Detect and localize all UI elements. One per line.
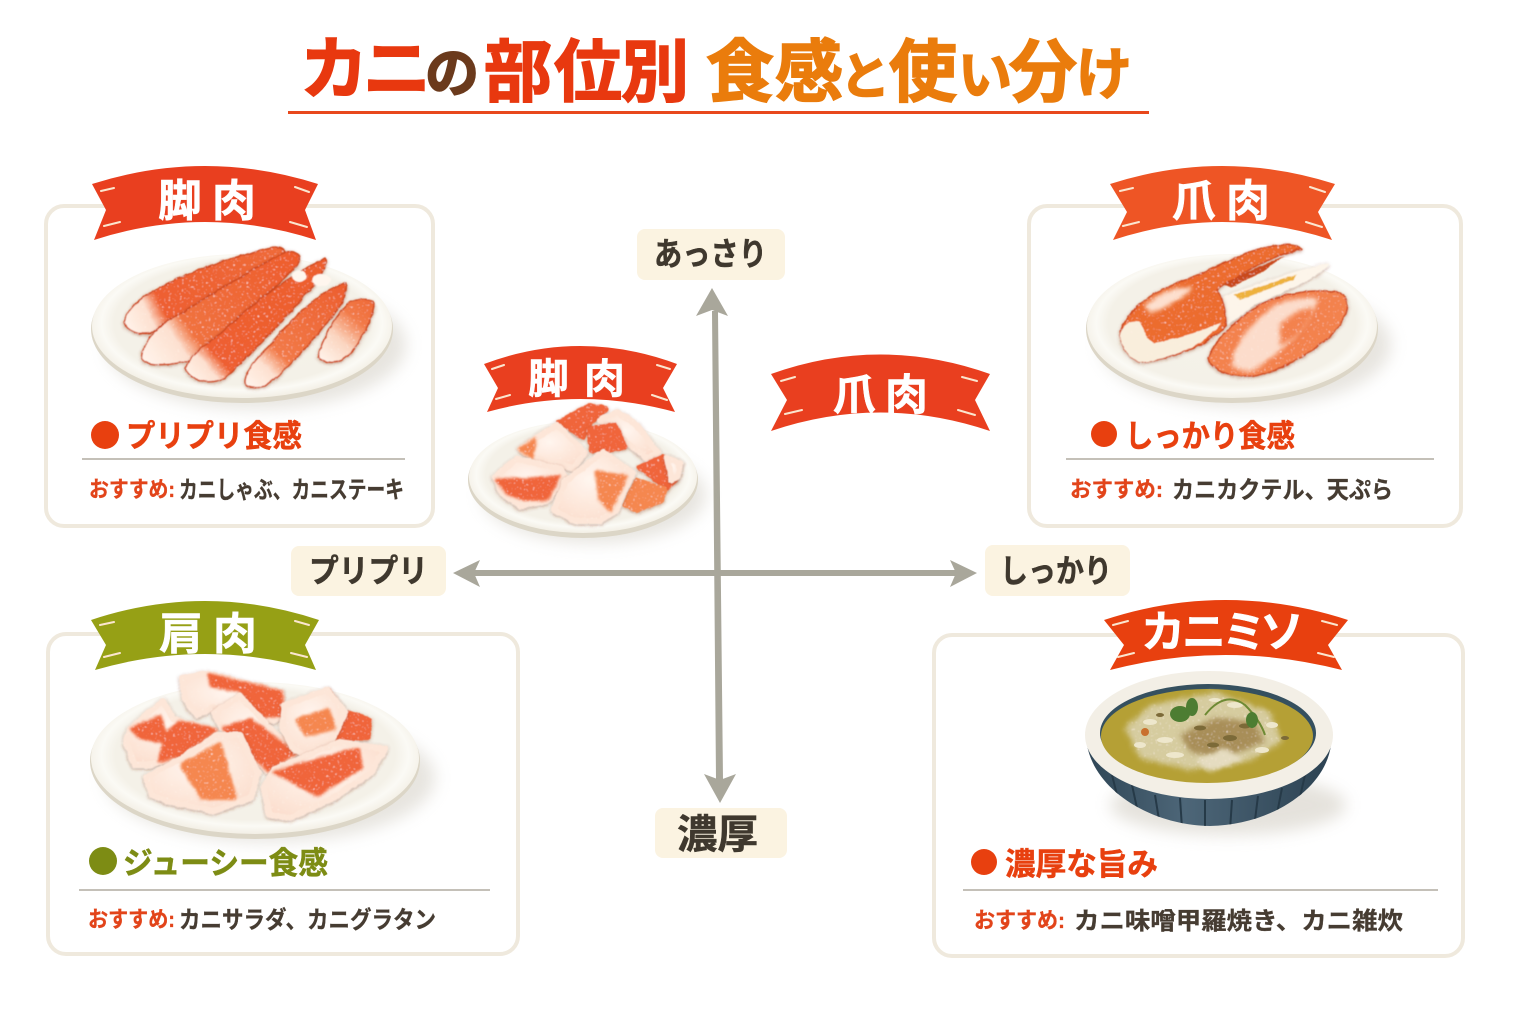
recommendation <box>89 477 404 504</box>
axis: vertical arrow (あっさり to 濃厚) <box>696 288 736 803</box>
chart marker: 爪肉 banner <box>771 354 990 431</box>
title: け <box>1076 43 1132 106</box>
bullet dot <box>91 421 119 449</box>
axis label: プリプリ: プリプリ <box>309 553 428 589</box>
axis label: 濃厚 <box>655 808 787 858</box>
panel: 脚肉 card <box>46 166 433 526</box>
banner: 脚肉 center <box>484 346 677 412</box>
food photo: crab leg meat on plate <box>91 247 406 409</box>
axis: horizontal arrow (プリプリ to しっかり) <box>453 560 977 587</box>
banner: 脚肉: 脚肉 <box>158 177 256 226</box>
recommendation: おすすめ: <box>1070 477 1163 502</box>
panel: 肩肉 card <box>48 601 518 954</box>
axis label: あっさり: あっさり <box>654 236 767 272</box>
texture label: しっかり食感 <box>1125 419 1295 454</box>
recommendation: カニしゃぶ、カニステーキ <box>179 477 404 504</box>
food photo: crab claws on plate <box>1086 245 1391 407</box>
title: 分 <box>1009 35 1077 111</box>
panel: カニミソ card <box>934 600 1463 956</box>
title: と <box>840 49 890 105</box>
axis label: 濃厚: 濃厚 <box>677 813 758 857</box>
texture label: ジューシー食感 <box>123 846 328 881</box>
title: 部位別 <box>484 35 689 111</box>
axis label: あっさり <box>637 229 785 280</box>
banner: 爪肉: 爪肉 <box>1172 177 1270 226</box>
title: 使 <box>889 35 957 111</box>
texture label: プリプリ食感 <box>126 419 302 454</box>
recommendation <box>1070 477 1393 504</box>
recommendation: おすすめ: <box>974 908 1065 933</box>
chart marker: 脚肉 with plate <box>468 346 706 543</box>
banner: 肩肉 <box>91 601 319 670</box>
axis label: しっかり: しっかり <box>1000 553 1112 589</box>
panel: 爪肉 card <box>1029 166 1461 526</box>
banner: 肩肉: 肩肉 <box>159 610 257 659</box>
banner: カニミソ: カニミソ <box>1141 608 1304 657</box>
recommendation: カニサラダ、カニグラタン <box>179 906 436 934</box>
banner: 爪肉 <box>1110 166 1335 240</box>
food photo: chunks on plate <box>468 405 706 543</box>
recommendation: カニ味噌甲羅焼き、カニ雑炊 <box>1074 908 1403 935</box>
food photo: crab shoulder meat on plate <box>90 673 435 842</box>
bullet dot <box>1091 421 1117 447</box>
title: い <box>958 46 1012 106</box>
title: の <box>425 44 479 104</box>
title: カニ <box>300 32 431 108</box>
food photo: crab miso in blue bowl <box>1085 671 1346 835</box>
texture label: 濃厚な旨み <box>1005 847 1158 882</box>
banner: カニミソ <box>1104 600 1348 670</box>
title underline <box>288 111 1149 114</box>
chart marker: 爪肉 banner: 爪肉 <box>833 372 928 420</box>
banner: 脚肉 center: 脚肉 <box>528 356 625 402</box>
title <box>300 32 1132 111</box>
bullet dot <box>971 849 997 875</box>
recommendation <box>88 906 436 934</box>
bullet dot <box>89 847 117 875</box>
recommendation: おすすめ: <box>88 907 175 932</box>
recommendation: カニカクテル、天ぷら <box>1172 477 1393 504</box>
axis label: しっかり <box>985 545 1130 596</box>
recommendation: おすすめ: <box>89 477 175 502</box>
title: 食感 <box>706 35 843 111</box>
banner: 脚肉 <box>92 166 318 240</box>
axis label: プリプリ <box>291 546 446 596</box>
